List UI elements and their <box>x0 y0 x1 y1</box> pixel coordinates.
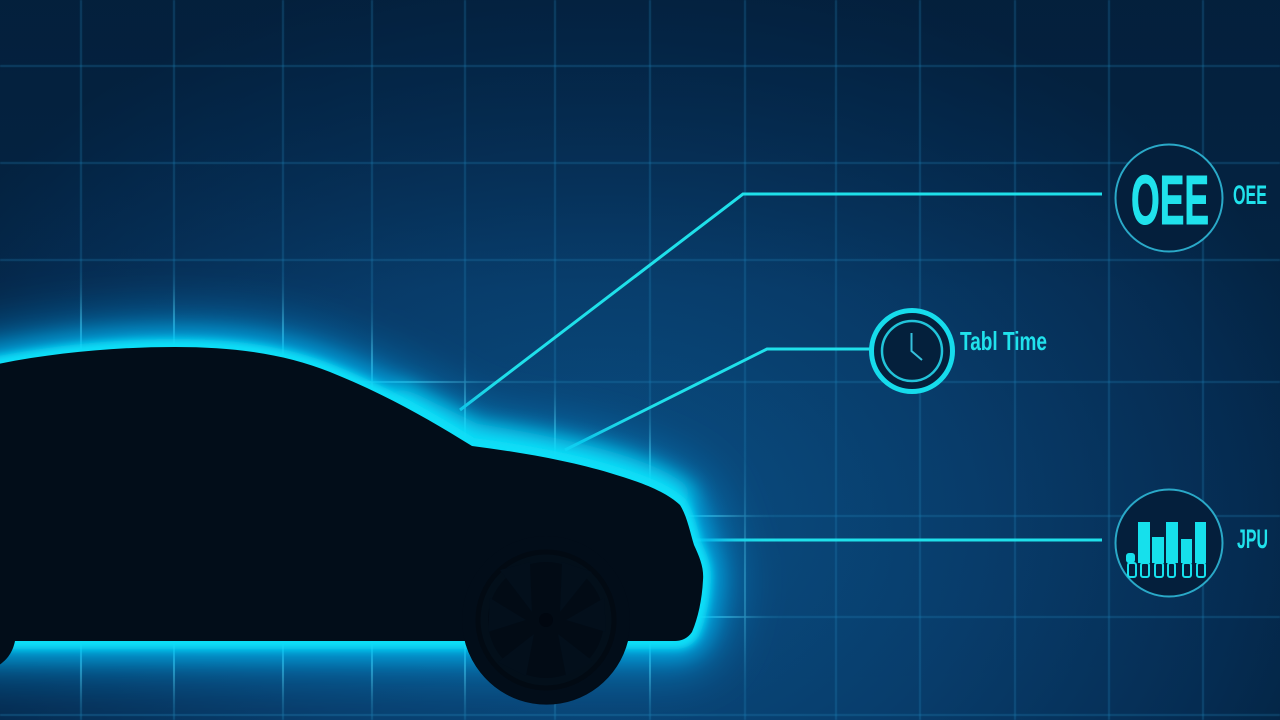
connector: JPU <box>690 538 1102 542</box>
Tabl Time label: Tabl Time <box>960 326 1047 356</box>
metric: Tabl Time <box>872 310 1047 392</box>
connector: Tabl Time <box>565 349 870 450</box>
OEE badge: OEE <box>1131 161 1209 239</box>
connector: OEE <box>460 194 1102 410</box>
icon: bar chart badge <box>1116 490 1222 596</box>
car silhouette <box>0 347 703 705</box>
front wheel <box>462 536 630 704</box>
metric: OEE <box>1116 144 1267 252</box>
car glow <box>0 347 703 641</box>
icon: clock <box>872 310 952 392</box>
metric: JPU <box>1116 490 1268 596</box>
OEE badge <box>1116 144 1222 252</box>
